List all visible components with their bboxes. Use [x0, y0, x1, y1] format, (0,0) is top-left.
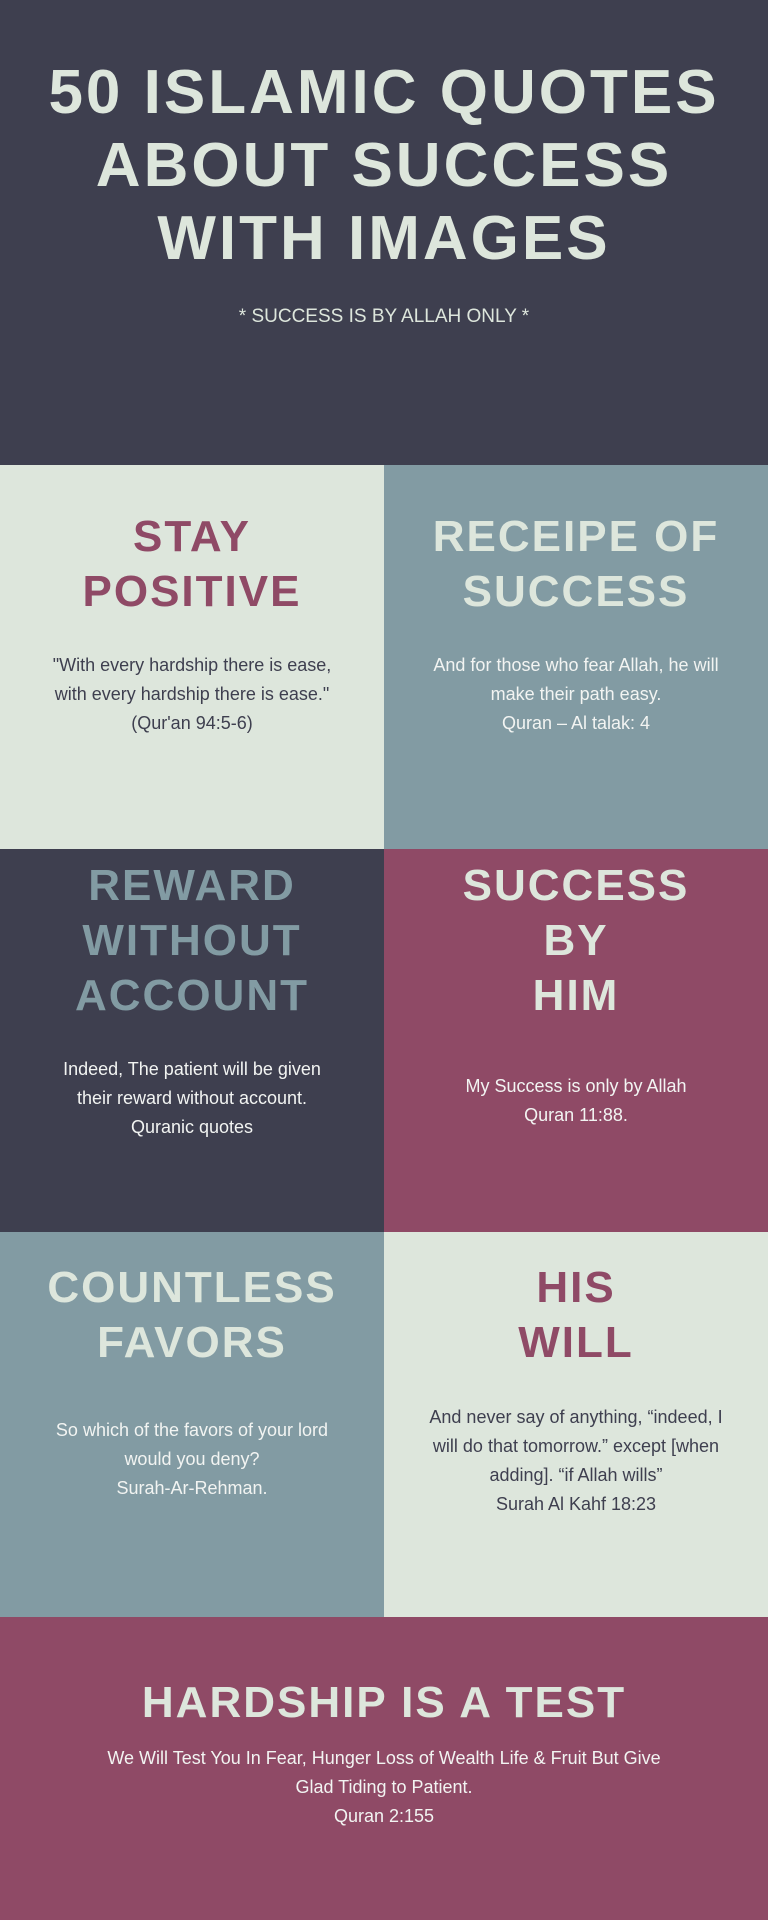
quote: would you deny? [124, 1449, 260, 1469]
title [48, 58, 720, 273]
panel: receipe of success [384, 465, 768, 849]
quote: will do that tomorrow.” except [when [433, 1436, 719, 1456]
quote [429, 1407, 723, 1514]
heading [518, 1263, 634, 1367]
quote: Surah Al Kahf 18:23 [496, 1494, 656, 1514]
subtitle: * SUCCESS IS BY ALLAH ONLY * [239, 306, 529, 327]
quote: Indeed, The patient will be given [63, 1059, 321, 1079]
panel: countless favors [0, 1232, 384, 1617]
quote: (Qur'an 94:5-6) [131, 713, 253, 733]
quote: Quran 11:88. [524, 1105, 628, 1125]
panel: hardship is a test [0, 1617, 768, 1920]
quote [433, 655, 719, 733]
panel: reward without account [0, 849, 384, 1232]
heading: ACCOUNT [75, 971, 309, 1020]
heading: COUNTLESS [47, 1263, 337, 1312]
heading: BY [543, 916, 609, 965]
title: ABOUT SUCCESS [96, 131, 672, 200]
title: WITH IMAGES [157, 204, 611, 273]
heading: STAY [133, 512, 251, 561]
quote [53, 655, 331, 733]
quote: Quran – Al talak: 4 [502, 713, 650, 733]
heading: POSITIVE [83, 567, 301, 616]
quote: So which of the favors of your lord [56, 1420, 328, 1440]
quote: with every hardship there is ease." [55, 684, 329, 704]
quote: their reward without account. [77, 1088, 307, 1108]
title: 50 ISLAMIC QUOTES [48, 58, 720, 127]
heading: SUCCESS [463, 567, 689, 616]
panel: his will [384, 1232, 768, 1617]
quote: Surah-Ar-Rehman. [116, 1478, 268, 1498]
heading: WITHOUT [82, 916, 302, 965]
heading [47, 1263, 337, 1367]
heading: RECEIPE OF [433, 512, 719, 561]
heading [75, 861, 309, 1020]
quote: Glad Tiding to Patient. [295, 1777, 473, 1797]
heading: HIM [533, 971, 619, 1020]
quote [63, 1059, 321, 1137]
quote [107, 1748, 661, 1826]
quote: "With every hardship there is ease, [53, 655, 331, 675]
heading: SUCCESS [463, 861, 689, 910]
quote [465, 1076, 687, 1125]
heading: FAVORS [97, 1318, 287, 1367]
heading: REWARD [88, 861, 296, 910]
panel: stay positive [0, 465, 384, 849]
heading [463, 861, 689, 1020]
panel: success by him [384, 849, 768, 1232]
quote: And for those who fear Allah, he will [433, 655, 719, 675]
panel: header [0, 0, 768, 465]
heading [83, 512, 301, 616]
heading: WILL [518, 1318, 634, 1367]
quote: My Success is only by Allah [465, 1076, 687, 1096]
heading [433, 512, 719, 616]
quote: make their path easy. [491, 684, 661, 704]
quote: And never say of anything, “indeed, I [429, 1407, 723, 1427]
quote: adding]. “if Allah wills” [489, 1465, 663, 1485]
quote: Quranic quotes [131, 1117, 253, 1137]
quote: We Will Test You In Fear, Hunger Loss of Wealth Life & Fruit But Give [107, 1748, 661, 1768]
heading: HIS [536, 1263, 616, 1312]
quote [56, 1420, 328, 1498]
quote: Quran 2:155 [334, 1806, 434, 1826]
heading: HARDSHIP IS A TEST [142, 1678, 626, 1727]
